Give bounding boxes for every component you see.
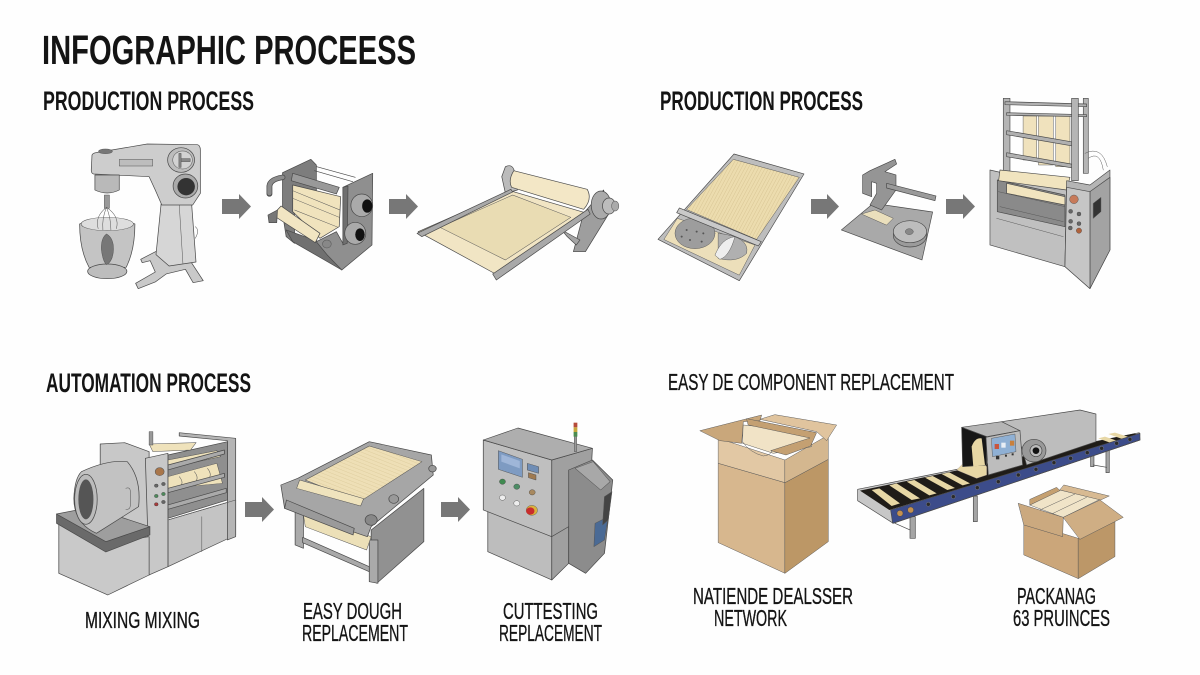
- label: easy dough replacement: [302, 598, 408, 646]
- heading: production process left: PRODUCTION PROCESS: [43, 86, 254, 116]
- icon: conveyor tunnel: [858, 410, 1140, 538]
- label: easy dough replacement: REPLACEMENT: [302, 620, 408, 646]
- heading: production process right: PRODUCTION PROCESS: [660, 86, 863, 116]
- heading: automation process: AUTOMATION PROCESS: [46, 368, 251, 398]
- icon: dough sheet table: [417, 166, 619, 280]
- label: mixing mixing: MIXING MIXING: [85, 607, 200, 633]
- arrow 6: [441, 497, 470, 522]
- icon: mixing machine: [57, 432, 236, 595]
- arrow 4: [946, 194, 975, 219]
- label: packanag 63 pruinces: [1013, 583, 1110, 631]
- icon: roller machine: [268, 159, 373, 270]
- label: natiende dealsser network: [693, 583, 853, 631]
- arrow 2: [389, 194, 418, 219]
- label: packanag 63 pruinces: PACKANAG: [1017, 583, 1096, 609]
- icon: dough press: [281, 442, 436, 583]
- icon: rack machine: [990, 98, 1110, 289]
- icon: dough rack frame: [658, 154, 804, 281]
- icon: cutter station: [841, 159, 936, 260]
- heading: easy de component replacement: EASY DE COMPONENT REPLACEMENT: [668, 369, 954, 395]
- label: cuttesting replacement: CUTTESTING: [503, 598, 598, 624]
- label: packanag 63 pruinces: 63 PRUINCES: [1013, 605, 1110, 631]
- arrow 3: [811, 194, 839, 219]
- arrow 5: [245, 497, 274, 522]
- title: INFOGRAPHIC PROCEESS: [42, 27, 416, 73]
- label: easy dough replacement: EASY DOUGH: [303, 598, 402, 624]
- icon: stand mixer: [80, 144, 203, 289]
- icon: tall cardboard box: [700, 415, 837, 573]
- arrow 1: [222, 194, 251, 219]
- label: natiende dealsser network: NETWORK: [714, 605, 787, 631]
- label: cuttesting replacement: REPLACEMENT: [499, 620, 602, 646]
- label: cuttesting replacement: [499, 598, 602, 646]
- label: natiende dealsser network: NATIENDE DEALSSER: [693, 583, 853, 609]
- icon: control cabinet: [483, 423, 613, 580]
- icon: small open cardboard box: [1018, 485, 1123, 579]
